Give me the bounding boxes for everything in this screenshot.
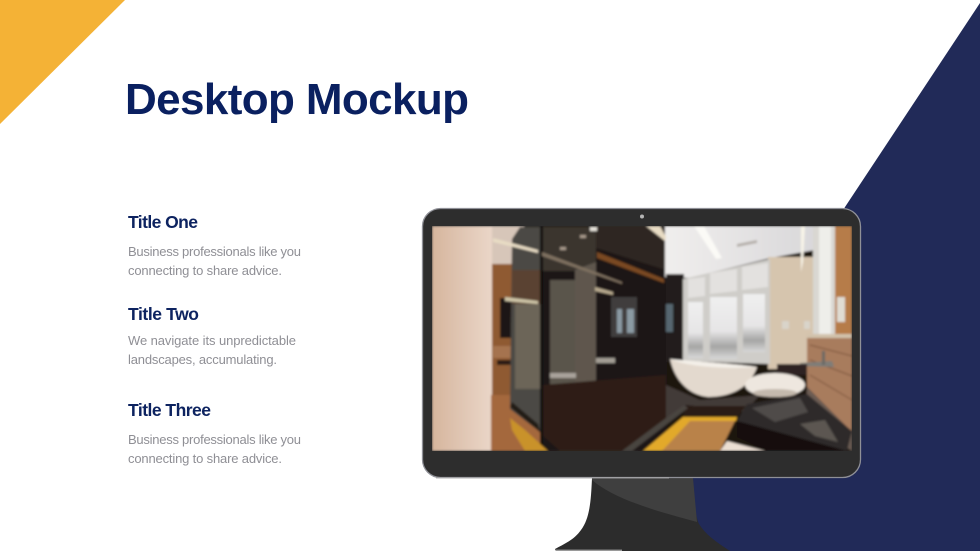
text block: title one: Title One [128, 212, 198, 232]
text block: title two: Title Two [128, 304, 199, 324]
text block: title three: connecting to share advice. [128, 451, 282, 466]
benches [550, 373, 576, 378]
lower wood wall [807, 335, 852, 432]
floor inside block [542, 375, 666, 451]
title: Desktop Mockup [125, 75, 469, 124]
dark basin block [777, 364, 807, 375]
text block: title one: Business professionals like you [128, 244, 301, 259]
webcam [640, 214, 644, 218]
glass block centre [542, 227, 667, 451]
left wall [432, 226, 492, 451]
desktop monitor mockup [422, 208, 860, 551]
windows [683, 259, 770, 364]
text block: title two [128, 304, 296, 367]
text block: title three: Business professionals like you [128, 432, 301, 447]
light wood floor [662, 416, 736, 451]
wood panel [492, 264, 514, 395]
glass block upper left [510, 227, 542, 432]
counter front [737, 422, 836, 450]
dark frame near block [666, 274, 684, 362]
text block: title two: landscapes, accumulating. [128, 352, 277, 367]
monitor stand [555, 478, 730, 551]
text block: title one [128, 212, 301, 278]
corner triangle [0, 0, 125, 124]
text block: title three: Title Three [128, 400, 211, 420]
screen photo: bathroom interior [432, 226, 852, 451]
right room: ceiling [665, 226, 815, 278]
faucet [800, 361, 834, 367]
upper wood wall [835, 226, 852, 336]
right room: rear wall [768, 257, 814, 369]
floor glow [510, 418, 548, 451]
text block: title three [128, 400, 301, 466]
vessel sink [745, 373, 805, 397]
ceiling lights and reflections [493, 238, 538, 253]
monitor body [422, 208, 860, 478]
switches [782, 321, 789, 329]
text block: title two: We navigate its unpredictable [128, 333, 296, 348]
reflected window [611, 297, 637, 337]
text block: title one: connecting to share advice. [128, 263, 282, 278]
wood floor left [490, 394, 542, 451]
right wall and mirror [801, 226, 805, 272]
tub platform [666, 385, 760, 420]
lower grey wall [805, 387, 852, 451]
upper wall [492, 226, 524, 266]
vertical glass divider [540, 226, 543, 451]
navy background shape [690, 3, 980, 551]
bottom bezel edge highlight [436, 477, 669, 478]
bathtub [670, 359, 757, 397]
counter top [737, 394, 852, 451]
